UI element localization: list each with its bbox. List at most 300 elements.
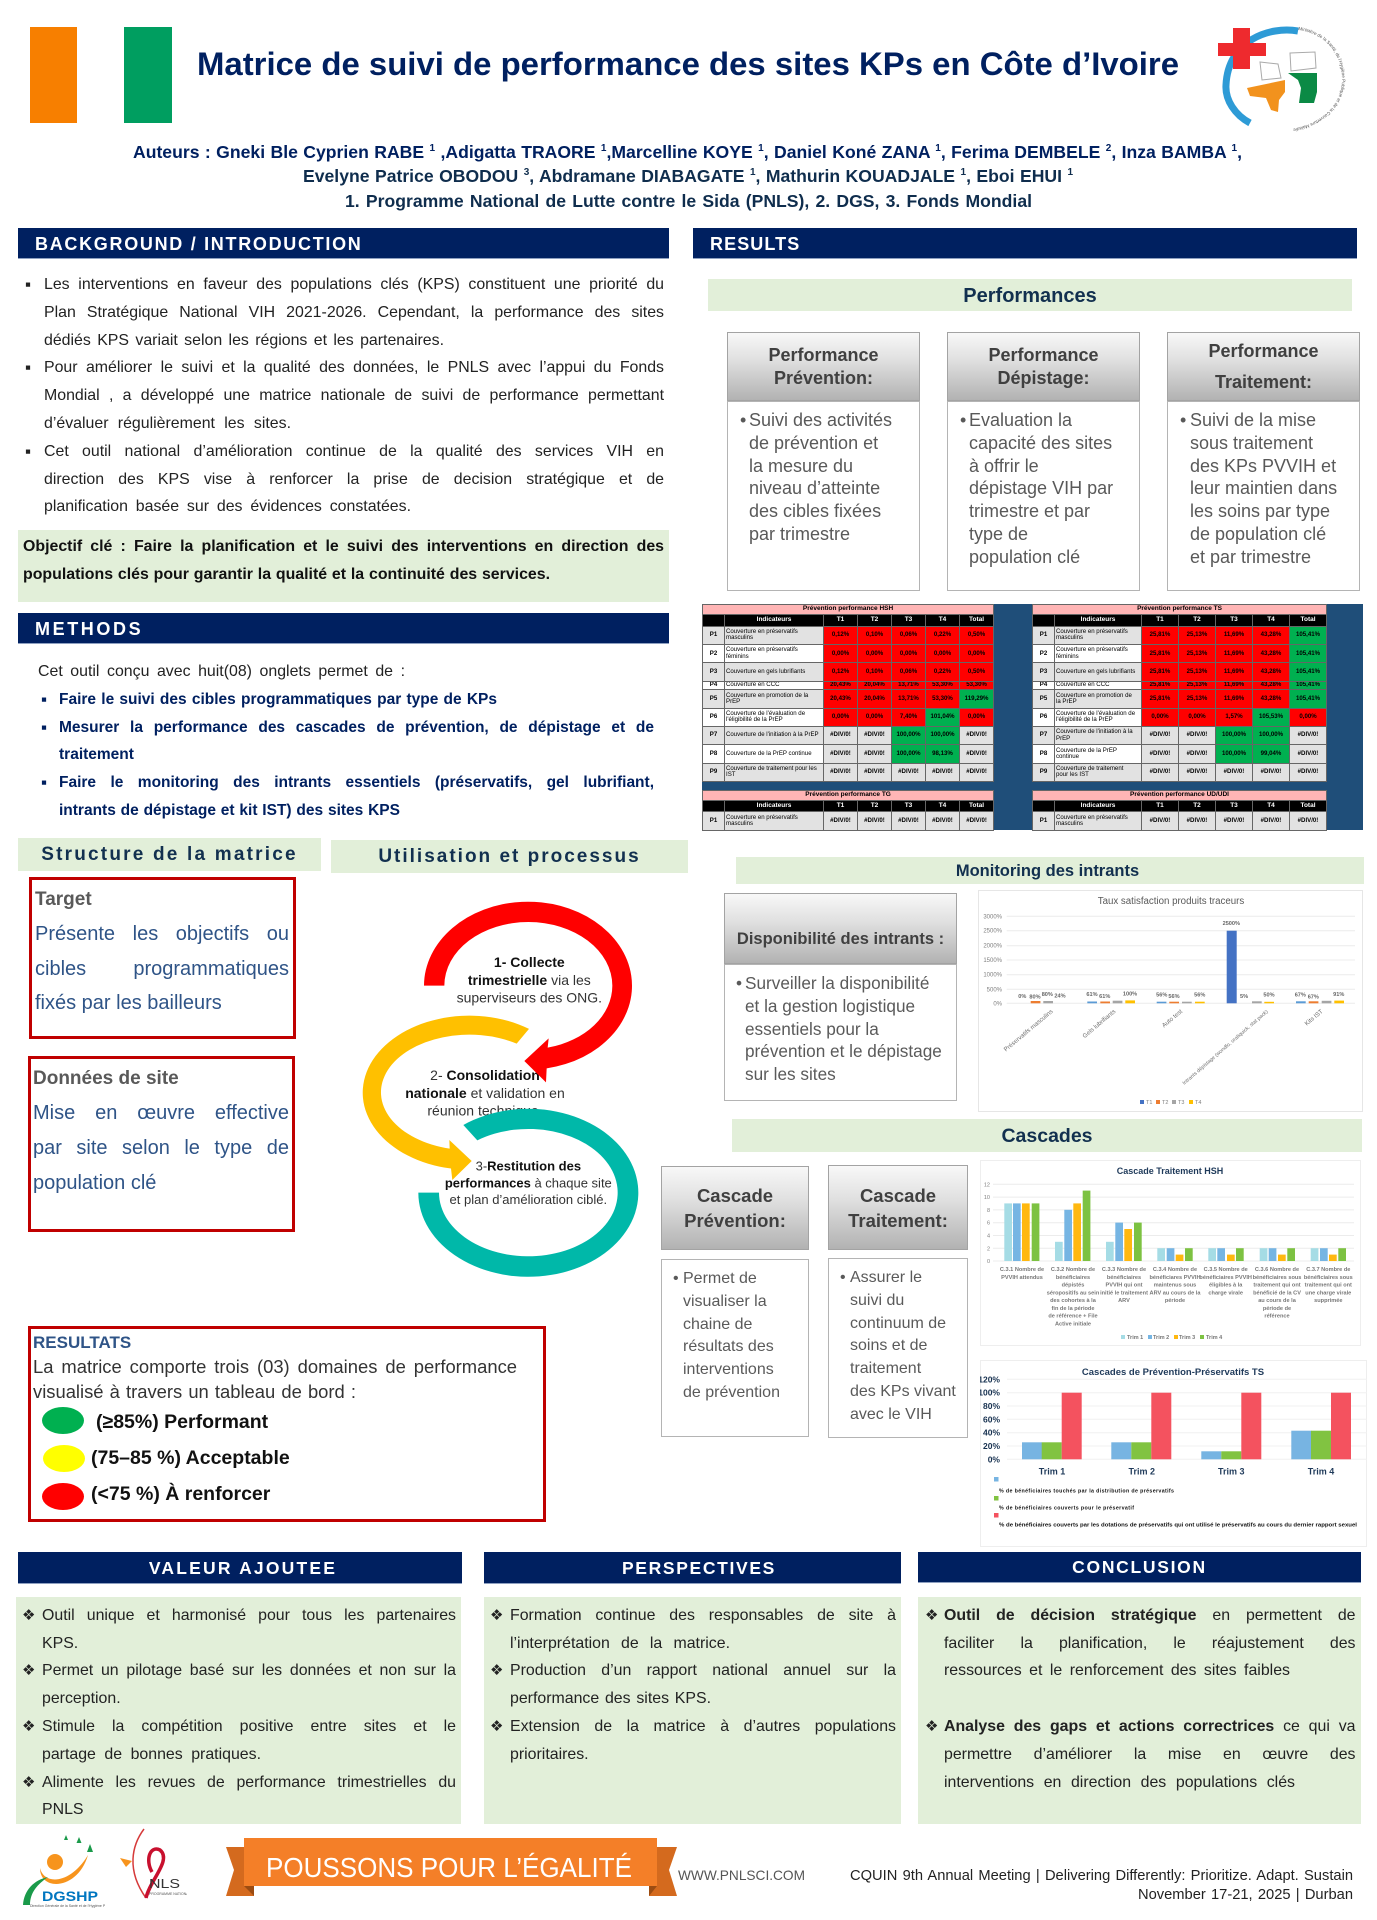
text block: methods: ▪	[41, 690, 47, 709]
card: cascade traitement: Assurer le	[850, 1269, 922, 1286]
table: prévention performance TS: Indicateurs	[1081, 616, 1115, 623]
table: prévention performance HSH: 0,50%	[968, 668, 985, 675]
table: prévention performance UD/UDI: #DIV/0!	[1261, 817, 1281, 824]
panel: valeur ajoutee: ❖	[22, 1773, 35, 1791]
chart: cascade traitement HSH: au cours de la	[1258, 1298, 1297, 1304]
table: prévention performance UD/UDI: T2	[1193, 802, 1201, 809]
chart: taux satisfaction produits traceurs: 56%	[1168, 994, 1180, 1000]
table: prévention performance HSH: 20,43%	[830, 681, 851, 688]
chart: cascade traitement HSH: bénéficiaires	[1107, 1275, 1141, 1281]
table: prévention performance UD/UDI: #DIV/0!	[1224, 817, 1244, 824]
table: prévention performance TG: Indicateurs	[757, 802, 791, 809]
conference info	[850, 1868, 1353, 1903]
chart: cascade traitement HSH: C.3.3 Nombre de	[1102, 1267, 1146, 1273]
table: prévention performance TS: T2	[1193, 616, 1201, 623]
chart: cascade traitement HSH: 2	[987, 1246, 990, 1252]
table: prévention performance HSH: Prévention performance HSH	[803, 605, 893, 612]
table: prévention performance TG: Couverture en préservatifs	[726, 814, 798, 821]
table: prévention performance HSH: P4	[710, 681, 717, 688]
heading: valeur ajoutee	[18, 1552, 462, 1584]
table: prévention performance UD/UDI: #DIV/0!	[1298, 817, 1318, 824]
table: prévention performance UD/UDI: T3	[1230, 802, 1238, 809]
chart: taux satisfaction produits traceurs: 2000%	[983, 944, 1003, 950]
card: cascade prévention: de prévention	[683, 1384, 780, 1401]
panel: resultats legend	[28, 1326, 546, 1522]
table: prévention performance TS: 25,81%	[1150, 681, 1170, 688]
table: prévention performance HSH: 7,40%	[900, 713, 917, 720]
text block: background bullets: Mondial , a développé une matrice nationale de suivi de performance permettant	[44, 387, 664, 404]
panel: conclusion: ressources et le renforcement des sites faibles	[944, 1662, 1290, 1679]
card: disponibilité des intrants: et la gestion logistique	[745, 996, 915, 1016]
chart: cascade traitement HSH: Trim 4	[1206, 1335, 1223, 1341]
chart: cascades de prévention préservatifs TS: Trim 4	[1308, 1466, 1334, 1476]
table: prévention performance TS: 25,81%	[1150, 650, 1170, 657]
diagram: process cycle: trimestrielle via les	[468, 972, 591, 988]
panel: target: fixés par les bailleurs	[35, 992, 222, 1014]
panel: valeur ajoutee: ❖	[22, 1661, 35, 1679]
table: prévention performance HSH: l'éligibilité de la PrEP	[726, 716, 783, 723]
table: prévention performance HSH: 0,00%	[968, 713, 985, 720]
table: prévention performance TS: #DIV/0!	[1150, 731, 1170, 738]
table: prévention performance HSH: #DIV/0!	[864, 768, 885, 775]
card: performance dépistage: capacité des sites	[969, 433, 1112, 453]
table: prévention performance HSH: #DIV/0!	[966, 768, 987, 775]
table: prévention performance TS: Couverture de l'initiation à la	[1056, 728, 1133, 735]
chart: cascade traitement HSH: C.3.2 Nombre de	[1051, 1267, 1095, 1273]
table: prévention performance HSH: Couverture en CCC	[726, 681, 780, 688]
chart: cascade traitement HSH: Trim 3	[1179, 1335, 1195, 1341]
table: prévention performance TS: #DIV/0!	[1261, 768, 1281, 775]
table: prévention performance TS: Couverture de la PrEP	[1056, 747, 1117, 754]
banner: poussons pour l'égalité: POUSSONS POUR L’ÉGALITÉ	[266, 1852, 632, 1883]
diagram: process cycle: et plan d’amélioration ciblé.	[450, 1192, 607, 1207]
card: performance dépistage: Performance	[988, 345, 1099, 365]
table: prévention performance HSH: 100,00%	[896, 750, 921, 757]
chart: taux satisfaction produits traceurs: 100%	[1123, 991, 1137, 997]
card: performance prévention: des cibles fixées	[749, 501, 881, 521]
diagram: process cycle: 3-Restitution des	[476, 1159, 581, 1174]
panel: perspectives: performance des sites KPS.	[510, 1690, 711, 1707]
heading: results: RESULTS	[710, 234, 800, 254]
table: prévention performance HSH: PrEP	[726, 698, 740, 705]
table: prévention performance HSH: 0,12%	[832, 631, 849, 638]
table: prévention performance TS: 25,13%	[1187, 695, 1207, 702]
table: prévention performance TS: #DIV/0!	[1150, 750, 1170, 757]
text block: background bullets: ▪	[25, 275, 31, 294]
panel: données de site: Données de site	[33, 1068, 179, 1089]
table: prévention performance TS: 43,28%	[1261, 668, 1281, 675]
chart: cascade traitement HSH: C.3.1 Nombre de	[1000, 1267, 1044, 1273]
table: prévention performance TS: 99,04%	[1261, 750, 1281, 757]
card: cascade prévention: •	[673, 1270, 679, 1287]
card: performance dépistage: dépistage VIH par	[969, 478, 1113, 498]
heading: cascades	[732, 1119, 1362, 1152]
table: prévention performance TS: Couverture en gels lubrifiants	[1056, 668, 1135, 675]
card: performance traitement: les soins par type	[1190, 501, 1330, 521]
table: prévention performance TS: 25,13%	[1187, 681, 1207, 688]
table: prévention performance HSH: T1	[837, 616, 844, 623]
table: prévention performance TG: #DIV/0!	[932, 817, 953, 824]
chart: cascade traitement HSH: ARV	[1118, 1298, 1130, 1304]
table: prévention performance TS: P2	[1040, 650, 1047, 657]
chart: cascade traitement HSH: une charge virale	[1305, 1290, 1351, 1296]
table: prévention performance TS: P5	[1040, 695, 1047, 702]
chart: cascades de prévention préservatifs TS: % de bénéficiaires couverts pour le préservatif	[999, 1506, 1134, 1512]
card: performance traitement: Performance	[1208, 341, 1319, 361]
chart: cascade traitement HSH: C.3.5 Nombre de	[1204, 1267, 1248, 1273]
text block: methods: ▪	[41, 773, 47, 792]
chart: taux satisfaction produits traceurs: T4	[1195, 1100, 1201, 1106]
table: prévention performance TS: l'éligibilité de la PrEP	[1056, 716, 1113, 723]
chart: taux satisfaction produits traceurs: Intrants dépistage (wondfo, oraliquick, stat pack)	[1182, 1009, 1270, 1087]
panel: target: cibles programmatiques	[35, 958, 289, 980]
card: performance traitement: Traitement:	[1215, 372, 1312, 392]
table: prévention performance TG: #DIV/0!	[830, 817, 851, 824]
table: prévention performance TS: 105,41%	[1296, 695, 1320, 702]
table: prévention performance TS: 25,13%	[1187, 668, 1207, 675]
heading: monitoring des intrants: Monitoring des intrants	[956, 862, 1139, 880]
table: prévention performance TS: #DIV/0!	[1150, 768, 1170, 775]
chart: cascade traitement HSH: 10	[984, 1195, 990, 1201]
card: performance dépistage	[947, 332, 1140, 591]
card: performance dépistage: Dépistage:	[997, 368, 1090, 388]
panel: conclusion	[918, 1597, 1361, 1824]
panel: conclusion: interventions en direction des populations clés	[944, 1774, 1295, 1791]
chart: cascade traitement HSH: charge virale	[1208, 1290, 1243, 1296]
chart: taux satisfaction produits traceurs: Préservatifs masculins	[1003, 1008, 1055, 1053]
table: prévention performance HSH: Total	[969, 616, 984, 623]
chart: cascades de prévention préservatifs TS: 60%	[983, 1414, 1000, 1424]
table: prévention performance HSH: P3	[710, 668, 717, 675]
text block: methods: traitement	[59, 746, 134, 763]
table: prévention performance HSH: T4	[939, 616, 946, 623]
panel: valeur ajoutee: KPS.	[42, 1635, 78, 1652]
panel: perspectives: ❖	[490, 1606, 503, 1624]
tables: background	[702, 604, 1363, 830]
table: prévention performance TS: 11,69%	[1224, 681, 1244, 688]
chart: cascade traitement HSH: 8	[987, 1208, 990, 1214]
panel: valeur ajoutee: PNLS	[42, 1801, 84, 1818]
panel: resultats legend: visualisé à travers un tableau de bord :	[33, 1381, 356, 1402]
heading: performances	[708, 279, 1352, 311]
card: performance prévention: la mesure du	[749, 456, 853, 476]
table: prévention performance TS: féminins	[1056, 653, 1079, 660]
table: prévention performance HSH: Couverture en gels lubrifiants	[726, 668, 805, 675]
flag: orange stripe	[30, 27, 77, 123]
table: prévention performance HSH: 0,00%	[968, 650, 985, 657]
chart: cascades de prévention préservatifs TS: Trim 3	[1218, 1466, 1245, 1476]
table: prévention performance TS: Couverture en préservatifs	[1056, 628, 1128, 635]
chart: taux satisfaction produits traceurs: 56%	[1156, 993, 1167, 999]
table: prévention performance TS: 105,41%	[1296, 668, 1320, 675]
table: prévention performance TS: T3	[1230, 616, 1238, 623]
table: prévention performance TS: PrEP	[1056, 735, 1070, 742]
logo: ministry	[1218, 26, 1346, 132]
authors: Evelyne Patrice OBODOU 3, Abdramane DIABAGATE 1, Mathurin KOUADJALE 1, Eboi EHUI 1	[303, 166, 1073, 186]
table: prévention performance HSH: #DIV/0!	[898, 768, 919, 775]
table: prévention performance TS: 11,69%	[1224, 668, 1244, 675]
diagram: process cycle: 1- Collecte	[494, 954, 565, 970]
table: prévention performance HSH: T2	[871, 616, 878, 623]
panel: perspectives: prioritaires.	[510, 1746, 589, 1763]
table: prévention performance TS: 25,13%	[1187, 650, 1207, 657]
banner: poussons pour l'égalité	[226, 1838, 677, 1896]
card: disponibilité des intrants: •	[736, 973, 742, 993]
card: cascade traitement	[828, 1165, 968, 1438]
chart: taux satisfaction produits traceurs: 80%	[1029, 994, 1041, 1000]
panel: conclusion: ❖	[925, 1606, 938, 1624]
chart: cascade traitement HSH: traitement qui ont	[1305, 1282, 1352, 1288]
card: cascade traitement: •	[840, 1269, 846, 1286]
panel: valeur ajoutee: Outil unique et harmonisé pour tous les partenaires	[42, 1607, 456, 1624]
table: prévention performance TS: #DIV/0!	[1298, 731, 1318, 738]
chart: taux satisfaction produits traceurs: 91%	[1333, 992, 1344, 998]
table: prévention performance HSH: P9	[710, 768, 717, 775]
chart: cascade traitement HSH: de référence + File	[1048, 1314, 1098, 1320]
chart: taux satisfaction produits traceurs: T1	[1146, 1100, 1152, 1106]
panel: perspectives	[484, 1597, 901, 1824]
table: prévention performance UD/UDI: Prévention performance UD/UDI	[1130, 791, 1229, 798]
title: Matrice de suivi de performance des sites KPs en Côte d’Ivoire	[197, 46, 1179, 82]
chart: taux satisfaction produits traceurs: 500%	[987, 987, 1003, 993]
heading: structure de la matrice	[18, 838, 321, 871]
chart: cascade traitement HSH: bénéficiaires sous	[1304, 1275, 1353, 1281]
card: cascade prévention: résultats des	[683, 1338, 774, 1355]
chart: cascade traitement HSH: PVVIH attendus	[1001, 1275, 1043, 1281]
chart: taux satisfaction produits traceurs: Gels lubrifiants	[1081, 1008, 1117, 1040]
logo: PNLS	[120, 1828, 187, 1898]
chart: cascade traitement HSH: des cohortes à la	[1050, 1298, 1097, 1304]
card: performance prévention: Suivi des activités	[749, 410, 892, 430]
table: prévention performance TS: 100,00%	[1222, 731, 1246, 738]
chart: cascades de prévention préservatifs TS: Trim 2	[1128, 1466, 1155, 1476]
chart: cascade traitement HSH: Active initiale	[1055, 1321, 1091, 1327]
table: prévention performance HSH: 0,10%	[866, 668, 883, 675]
heading: monitoring des intrants	[736, 857, 1364, 884]
table: prévention performance TS: T4	[1267, 616, 1275, 623]
chart: taux satisfaction produits traceurs: 61%	[1086, 992, 1098, 998]
authors	[133, 142, 1242, 211]
table: prévention performance TS: continue	[1056, 753, 1079, 760]
table: prévention performance HSH: 20,04%	[864, 695, 885, 702]
panel: target	[29, 877, 296, 1039]
text block: methods: Faire le suivi des cibles programmatiques par type de KPs	[59, 691, 497, 708]
text block: methods: Mesurer la performance des cascades de prévention, de dépistage et de	[59, 719, 654, 736]
table: prévention performance TS: #DIV/0!	[1298, 750, 1318, 757]
chart: cascade traitement HSH: bénéficiaires PVVIH	[1199, 1275, 1252, 1281]
table: prévention performance TS: 25,81%	[1150, 695, 1170, 702]
card: performance dépistage: population clé	[969, 547, 1080, 567]
table: prévention performance TS: P3	[1040, 668, 1047, 675]
table: prévention performance HSH: masculins	[726, 634, 753, 641]
chart: cascade traitement HSH: C.3.7 Nombre de	[1306, 1267, 1350, 1273]
table: prévention performance HSH: 0,50%	[968, 631, 985, 638]
text block: methods: ▪	[41, 718, 47, 737]
card: cascade prévention: Cascade	[697, 1185, 773, 1206]
table: prévention performance HSH: 13,71%	[898, 695, 919, 702]
table: prévention performance TS: #DIV/0!	[1187, 731, 1207, 738]
table: prévention performance HSH: 53,30%	[966, 681, 987, 688]
chart: taux satisfaction produits traceurs: 50%	[1263, 993, 1275, 999]
chart: taux satisfaction produits traceurs: 61%	[1099, 994, 1110, 1000]
heading: perspectives: PERSPECTIVES	[622, 1558, 776, 1578]
table: prévention performance HSH: 0,00%	[900, 650, 917, 657]
panel: perspectives: ❖	[490, 1717, 503, 1735]
panel: valeur ajoutee: perception.	[42, 1690, 121, 1707]
panel: valeur ajoutee: Alimente les revues de performance trimestrielles du	[42, 1774, 456, 1791]
chart: cascade traitement HSH: Cascade Traitement HSH	[1117, 1166, 1223, 1176]
panel: valeur ajoutee: ❖	[22, 1717, 35, 1735]
panel: conclusion: Outil de décision stratégique en permettent de	[944, 1607, 1356, 1624]
table: prévention performance TG: #DIV/0!	[898, 817, 919, 824]
table: prévention performance HSH: 0,12%	[832, 668, 849, 675]
table: prévention performance HSH: féminins	[726, 653, 749, 660]
table: prévention performance TS: 1,57%	[1225, 713, 1243, 720]
heading: utilisation et processus: Utilisation et processus	[378, 846, 641, 867]
icon: red dot	[42, 1482, 84, 1510]
panel: données de site	[28, 1056, 295, 1232]
card: performance traitement: sous traitement	[1190, 433, 1313, 453]
chart: cascades de prévention préservatifs TS	[980, 1360, 1367, 1547]
heading: results	[693, 228, 1357, 259]
table: prévention performance UD/UDI: Indicateurs	[1081, 802, 1115, 809]
chart: cascade traitement HSH: dépistés	[1062, 1282, 1084, 1288]
chart: taux satisfaction produits traceurs: 0%	[993, 1001, 1003, 1007]
heading: background / introduction: BACKGROUND / INTRODUCTION	[35, 234, 362, 254]
text block: background bullets: ▪	[25, 358, 31, 377]
panel: resultats legend: La matrice comporte trois (03) domaines de performance	[33, 1356, 517, 1377]
chart: taux satisfaction produits traceurs: Taux satisfaction produits traceurs	[1098, 896, 1244, 907]
table: prévention performance HSH: Couverture de traitement pour les	[726, 765, 817, 772]
table: prévention performance TS: P1	[1040, 631, 1047, 638]
panel: valeur ajoutee: partage de bonnes pratiques.	[42, 1746, 261, 1763]
text block: background bullets: ▪	[25, 442, 31, 461]
chart: taux satisfaction produits traceurs: 1000%	[983, 973, 1003, 979]
table: prévention performance HSH: Couverture de la PrEP continue	[726, 750, 812, 757]
heading: perspectives	[484, 1552, 901, 1584]
card: cascade traitement: des KPs vivant	[850, 1383, 956, 1400]
table: prévention performance TS: #DIV/0!	[1224, 768, 1244, 775]
table: prévention performance HSH: 0,10%	[866, 631, 883, 638]
panel: valeur ajoutee: ❖	[22, 1606, 35, 1624]
card: cascade prévention: chaine de	[683, 1316, 752, 1333]
table: prévention performance TS: 105,41%	[1296, 650, 1320, 657]
chart: cascade traitement HSH: initié le traitement	[1100, 1290, 1148, 1296]
chart: taux satisfaction produits traceurs: 24%	[1054, 994, 1066, 1000]
heading: background / introduction	[18, 228, 669, 259]
heading: methods	[18, 613, 669, 644]
heading: valeur ajoutee: VALEUR AJOUTEE	[149, 1558, 337, 1578]
heading: cascades: Cascades	[1001, 1125, 1093, 1147]
table: prévention performance TS: Total	[1300, 616, 1316, 623]
panel: conclusion: Analyse des gaps et actions correctrices ce qui va	[944, 1718, 1356, 1735]
table: prévention performance UD/UDI: T1	[1156, 802, 1164, 809]
table: prévention performance HSH: 0,06%	[900, 631, 917, 638]
text block: methods: Cet outil conçu avec huit(08) onglets permet de :	[38, 663, 405, 680]
table: prévention performance HSH: 0,00%	[866, 713, 883, 720]
card: cascade traitement: Cascade	[860, 1185, 936, 1206]
chart: cascade traitement HSH: bénéficiares PVVIH	[1150, 1275, 1200, 1281]
chart: cascade traitement HSH: bénéficiaires	[1056, 1275, 1090, 1281]
callout: objectif clé	[18, 530, 669, 602]
table: prévention performance TS: 25,81%	[1150, 631, 1170, 638]
card: cascade traitement: traitement	[850, 1360, 921, 1377]
card: performance prévention	[727, 332, 920, 591]
table: prévention performance TS: #DIV/0!	[1298, 768, 1318, 775]
chart: cascades de prévention préservatifs TS: Trim 1	[1039, 1466, 1065, 1476]
website: WWW.PNLSCI.COM	[678, 1868, 805, 1883]
card: performance traitement: de population clé	[1190, 524, 1326, 544]
chart: taux satisfaction produits traceurs: 67%	[1308, 994, 1319, 1000]
card: performance prévention: niveau d’atteinte	[749, 478, 880, 498]
card: performance dépistage: type de	[969, 524, 1028, 544]
chart: cascade traitement HSH: bénéficié de la CV	[1253, 1290, 1301, 1296]
chart: cascade traitement HSH: Trim 1	[1127, 1335, 1143, 1341]
card: performance prévention: Performance	[768, 345, 879, 365]
card: cascade traitement: avec le VIH	[850, 1406, 932, 1423]
logo: DGSHP: DGSHP	[42, 1888, 98, 1904]
table: prévention performance TG: T1	[837, 802, 844, 809]
table: prévention performance TS: masculins	[1056, 634, 1083, 641]
card: disponibilité des intrants	[724, 893, 957, 1101]
table: prévention performance UD/UDI: Couverture en préservatifs	[1056, 814, 1128, 821]
table: prévention performance TG: Prévention performance TG	[805, 791, 891, 798]
table: prévention performance HSH: #DIV/0!	[966, 750, 987, 757]
chart: cascade traitement HSH: référence	[1264, 1314, 1290, 1320]
table: prévention performance HSH: 100,00%	[930, 731, 955, 738]
card: performance prévention: par trimestre	[749, 524, 850, 544]
table: prévention performance TG: #DIV/0!	[966, 817, 987, 824]
table: prévention performance HSH: 13,71%	[898, 681, 919, 688]
card: cascade prévention: Permet de	[683, 1270, 757, 1287]
panel: données de site: population clé	[33, 1172, 156, 1194]
chart: cascade traitement HSH: 4	[987, 1234, 990, 1240]
chart: taux satisfaction produits traceurs: 56%	[1194, 993, 1205, 999]
logo: PNLS: NLS	[149, 1876, 180, 1891]
table: prévention performance TG: T3	[905, 802, 912, 809]
table: prévention performance HSH: 0,00%	[934, 650, 951, 657]
panel: valeur ajoutee: Stimule la compétition positive entre sites et le	[42, 1718, 456, 1735]
legend: a renforcer: (<75 %) À renforcer	[91, 1483, 270, 1505]
text block: background bullets: planification basée sur des évidences constatées.	[44, 498, 411, 515]
table: prévention performance UD/UDI: #DIV/0!	[1187, 817, 1207, 824]
card: cascade traitement: suivi du	[850, 1292, 904, 1309]
table: prévention performance HSH: Couverture en préservatifs	[726, 646, 798, 653]
panel: valeur ajoutee: Permet un pilotage basé sur les données et non sur la	[42, 1662, 456, 1679]
panel: conclusion: permettre d’améliorer la mise en œuvre des	[944, 1746, 1356, 1763]
card: performance traitement	[1167, 332, 1360, 591]
table: prévention performance TG: Total	[969, 802, 984, 809]
table: prévention performance TS: 105,41%	[1296, 631, 1320, 638]
chart: cascade traitement HSH: bénéficiaires sous	[1253, 1275, 1301, 1281]
table: prévention performance TS: T1	[1156, 616, 1164, 623]
chart: cascade traitement HSH: supprimée	[1314, 1298, 1342, 1304]
chart: cascade traitement HSH: période	[1165, 1298, 1185, 1304]
chart: cascade traitement HSH: période de	[1263, 1306, 1291, 1312]
card: performance traitement: des KPs PVVIH et	[1190, 456, 1336, 476]
table: prévention performance HSH: 119,29%	[965, 695, 988, 702]
table: prévention performance HSH: 53,30%	[932, 681, 953, 688]
chart: cascades de prévention préservatifs TS: % de bénéficiaires couverts par les dotations de préservatifs qui ont utilisé le préservatifs au cours du dernier rapport sexuel	[999, 1522, 1358, 1528]
table: prévention performance HSH: #DIV/0!	[830, 768, 851, 775]
table: prévention performance TS	[1032, 604, 1327, 782]
card: cascade prévention: interventions	[683, 1361, 774, 1378]
table: prévention performance TS: P7	[1040, 731, 1047, 738]
chart: cascades de prévention préservatifs TS: % de bénéficiaires touchés par la distribution de préservatifs	[999, 1488, 1174, 1494]
table: prévention performance TS: 105,53%	[1259, 713, 1283, 720]
table: prévention performance HSH: #DIV/0!	[966, 731, 987, 738]
table: prévention performance HSH: Indicateurs	[757, 616, 791, 623]
